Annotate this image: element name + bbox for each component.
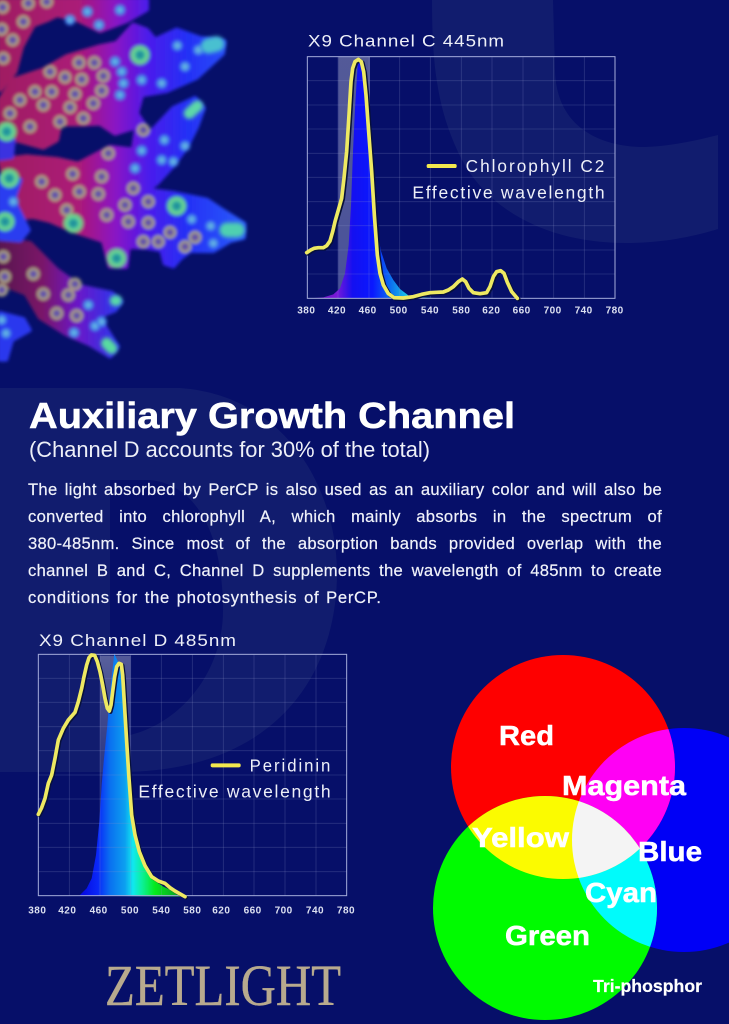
colour labels: Red: [499, 720, 554, 751]
frame: [38, 654, 347, 896]
legend: [138, 755, 332, 802]
grid: [307, 57, 615, 298]
heading: Auxiliary Growth Channel: Auxiliary Growth Channel: [29, 395, 515, 436]
colour labels: Magenta: [562, 770, 686, 801]
x axis labels: 660: [513, 305, 531, 316]
x axis labels: 380: [297, 305, 315, 316]
coral body: [0, 0, 244, 359]
x axis labels: 740: [306, 906, 324, 917]
colour labels: [472, 720, 702, 996]
x axis labels: 580: [183, 906, 201, 917]
colour labels: Tri-phosphor: [593, 976, 702, 996]
cyan overlap: [578, 801, 657, 947]
yellow overlap: [468, 796, 640, 879]
body text: conditions for the photosynthesis of PerCP.: [28, 588, 382, 607]
x axis labels: 580: [452, 305, 470, 316]
body text: channel B and C, Channel D supplements the wavelength of 485nm to create: [28, 561, 662, 580]
body text: The light absorbed by PerCP is also used as an auxiliary color and will also be: [28, 480, 662, 499]
x axis labels: 500: [121, 906, 139, 917]
x axis labels: 620: [482, 305, 500, 316]
x axis labels: 540: [152, 906, 170, 917]
body text: [28, 480, 662, 607]
peridinin curve: [38, 655, 186, 898]
x axis labels: 460: [90, 906, 108, 917]
subheading: (Channel D accounts for 30% of the total): [29, 437, 430, 462]
x axis labels: 740: [575, 305, 593, 316]
frame: [307, 57, 615, 298]
x axis labels: 620: [212, 906, 230, 917]
grey 445nm band: [338, 57, 370, 298]
colour labels: Yellow: [472, 822, 569, 853]
magenta overlap: [578, 729, 675, 848]
spectrum fill: [79, 653, 185, 897]
spectrum fill: [308, 61, 442, 298]
body text: converted into chlorophyll A, which mainly absorbs in the spectrum of: [28, 507, 662, 526]
green circle: [433, 796, 657, 1020]
x axis labels: 700: [544, 305, 562, 316]
x axis labels: 380: [28, 906, 46, 917]
colour labels: Blue: [638, 836, 702, 867]
x axis labels: 660: [244, 906, 262, 917]
colour labels: Cyan: [585, 877, 657, 908]
polyps: [0, 0, 220, 340]
x axis labels: 540: [421, 305, 439, 316]
chart title: channel D: X9 Channel D 485nm: [39, 631, 237, 650]
legend: Peridinin: [250, 755, 332, 775]
chlorophyll C2 curve: [307, 59, 519, 299]
x axis labels: [297, 305, 624, 316]
x axis labels: 420: [58, 906, 76, 917]
x axis labels: 700: [275, 906, 293, 917]
x axis labels: 420: [328, 305, 346, 316]
x axis labels: [28, 906, 355, 917]
x axis labels: 780: [337, 906, 355, 917]
red circle: [451, 655, 675, 879]
grey 485nm band: [100, 656, 131, 896]
chart: X9 Channel D 485nm spectrum: [28, 653, 355, 917]
legend: Effective wavelength: [412, 183, 606, 203]
x axis labels: 460: [359, 305, 377, 316]
chart: X9 Channel C 445nm spectrum: [297, 56, 624, 316]
x axis labels: 780: [606, 305, 624, 316]
x axis labels: 500: [390, 305, 408, 316]
coral photo: [0, 0, 249, 364]
tri-phosphor colour mixing diagram: [433, 655, 729, 1020]
body text: 380-485nm. Since most of the absorption bands provided overlap with the: [28, 534, 662, 553]
colour labels: Green: [505, 920, 590, 951]
legend: [412, 156, 606, 203]
green branch tips: [107, 44, 237, 348]
legend: Chlorophyll C2: [466, 156, 606, 176]
legend: Effective wavelength: [138, 782, 332, 802]
chart title: channel C: X9 Channel C 445nm: [308, 32, 505, 50]
grid: [38, 654, 347, 896]
white centre overlap: [572, 801, 640, 878]
blue circle: [572, 728, 729, 952]
